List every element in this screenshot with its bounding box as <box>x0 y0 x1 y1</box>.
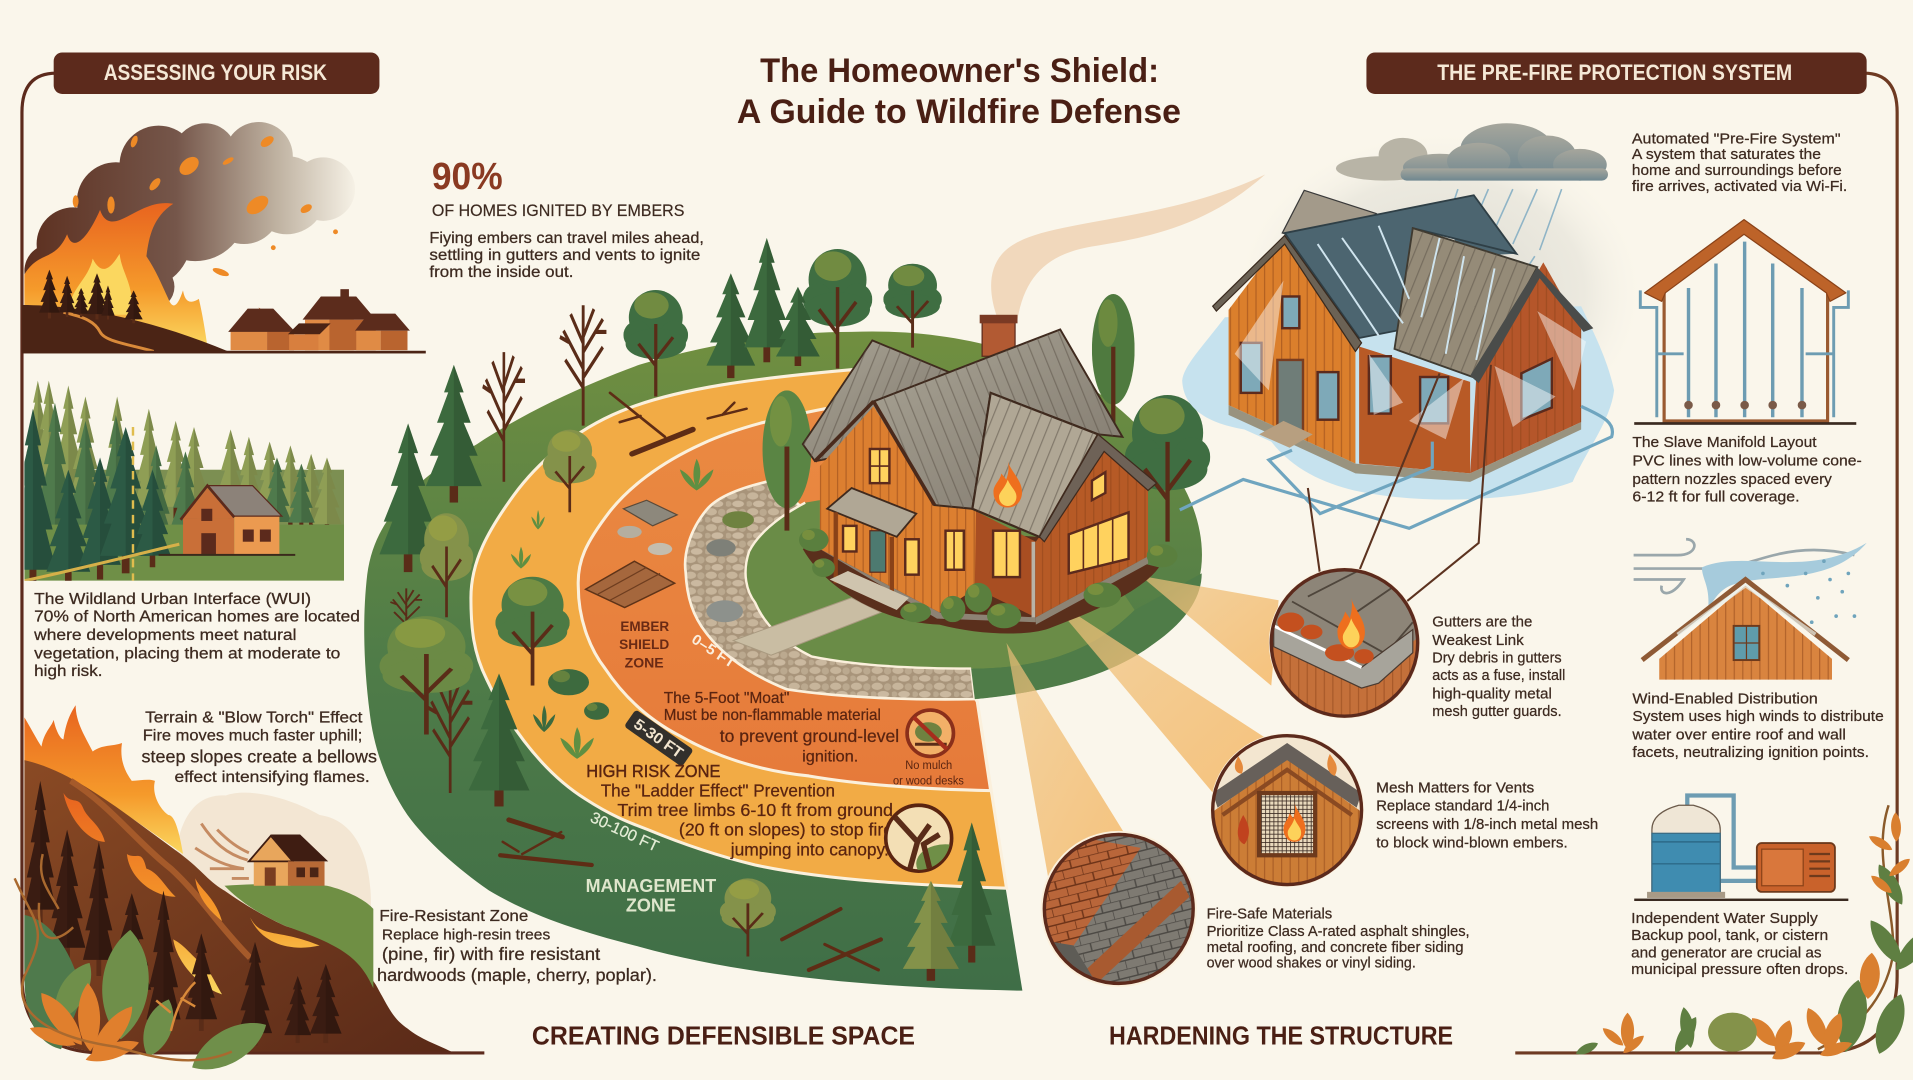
text: terrain and blow torch effect: steep slopes create a bellows <box>142 747 377 767</box>
house <box>181 486 282 555</box>
text: fire-resistant zone: (pine, fir) with fire resistant <box>382 944 600 964</box>
zone: management <box>364 331 1202 991</box>
text: fire-safe materials: metal roofing, and concrete fiber siding <box>1207 939 1464 956</box>
lawn <box>746 464 1135 669</box>
cloud <box>1336 123 1608 181</box>
title: The Homeowner's Shield: <box>760 52 1159 90</box>
text: wind-enabled distribution: water over entire roof and wall <box>1631 726 1846 743</box>
trees and plants <box>379 238 996 981</box>
text: the 5-foot moat: ignition. <box>802 747 858 765</box>
stat: 90 percent of homes ignited by embers: from the inside out. <box>429 263 573 281</box>
text: vents <box>1376 779 1598 851</box>
windows and door <box>1241 296 1552 423</box>
text: slave manifold layout: 6-12 ft for full coverage. <box>1632 488 1800 505</box>
heading: creating defensible space: CREATING DEFENSIBLE SPACE <box>532 1020 915 1050</box>
text: wildland urban interface: vegetation, placing them at moderate to <box>34 644 340 662</box>
icon: no mulch <box>893 710 964 787</box>
text: gutters <box>1432 613 1565 720</box>
foliage <box>15 854 274 1080</box>
pipes <box>1180 406 1612 528</box>
text: wind-enabled distribution: facets, neutralizing ignition points. <box>1632 744 1869 761</box>
callout beams <box>1007 576 1279 883</box>
smoke plume from chimney <box>991 174 1265 320</box>
windows <box>843 449 1129 577</box>
illustration: fire moving uphill <box>15 705 451 1080</box>
label: 5-30 ft <box>624 709 694 767</box>
text: gutters: acts as a fuse, install <box>1432 667 1565 684</box>
text: vents: to block wind-blown embers. <box>1376 834 1568 851</box>
foliage: bottom right corner <box>1574 805 1913 1064</box>
text: independent water supply: municipal pressure often drops. <box>1631 961 1848 978</box>
text: fire-resistant zone: Replace high-resin trees <box>382 926 551 943</box>
illustration: ember storm over houses <box>22 122 426 353</box>
heading: pre-fire protection system: THE PRE-FIRE PROTECTION SYSTEM <box>1437 60 1792 85</box>
text: the 5-foot moat: The 5-Foot "Moat" <box>664 689 790 707</box>
label: ember shield zone: SHIELD <box>619 636 669 652</box>
text: vents: Replace standard 1/4-inch <box>1376 798 1549 815</box>
heading: hardening the structure: HARDENING THE STRUCTURE <box>1109 1020 1453 1050</box>
stone path <box>685 481 975 699</box>
text: wind-enabled distribution: Wind-Enabled Distribution <box>1632 690 1818 707</box>
stones and decking <box>586 500 754 622</box>
text: fire-safe materials: over wood shakes or vinyl siding. <box>1207 954 1416 971</box>
text: slave manifold layout: The Slave Manifold Layout <box>1632 434 1817 451</box>
text: gutters: high-quality metal <box>1432 685 1552 702</box>
text: fire-resistant zone <box>377 907 657 985</box>
house on ridge <box>249 835 328 886</box>
text: independent water supply: Backup pool, tank, or cistern <box>1631 927 1828 944</box>
text: automated pre-fire system: Automated "Pre-Fire System" <box>1632 130 1841 147</box>
label: 30-100 ft: 30-100 FT <box>588 809 661 856</box>
label: 0-5 ft: 0–5 FT <box>688 632 738 672</box>
title: A Guide to Wildfire Defense <box>737 93 1181 131</box>
label: management zone <box>586 875 716 915</box>
text: terrain and blow torch effect <box>142 708 377 786</box>
icon: ladder effect trimming <box>884 803 954 873</box>
heading: assessing your risk <box>54 52 379 94</box>
heading: assessing your risk: ASSESSING YOUR RISK <box>104 60 327 85</box>
text: high risk zone ladder effect <box>586 761 893 859</box>
text: gutters: Weakest Link <box>1432 632 1524 649</box>
label: management zone: MANAGEMENT <box>586 875 716 896</box>
text: slave manifold layout: pattern nozzles spaced every <box>1632 471 1832 488</box>
diagram: slave manifold layout <box>1634 220 1856 425</box>
illustration: wildland urban interface <box>10 381 344 592</box>
zone: high risk <box>471 370 1007 888</box>
text: gutters: Dry debris in gutters <box>1432 649 1562 666</box>
text: independent water supply: Independent Water Supply <box>1631 910 1818 927</box>
text: terrain and blow torch effect: Terrain & "Blow Torch" Effect <box>145 708 363 726</box>
detail: roofing <box>1037 830 1202 988</box>
text: automated pre-fire system: home and surroundings before <box>1632 162 1842 179</box>
main house <box>763 294 1210 634</box>
text: vents: screens with 1/8-inch metal mesh <box>1376 816 1598 833</box>
text: independent water supply <box>1631 910 1848 978</box>
text: gutters: Gutters are the <box>1432 613 1532 630</box>
porch <box>827 488 916 537</box>
text: fire-resistant zone: hardwoods (maple, cherry, poplar). <box>377 965 657 985</box>
label: 5-30 ft: 5-30 FT <box>630 716 687 762</box>
text: the 5-foot moat: to prevent ground-level <box>720 727 899 746</box>
stat: 90 percent of homes ignited by embers: settling in gutters and vents to ignite <box>429 246 700 264</box>
stat: 90 percent of homes ignited by embers: 90% <box>432 156 503 198</box>
automated pre-fire house <box>1180 123 1647 528</box>
fallen logs <box>500 393 881 970</box>
text: fire-resistant zone: Fire-Resistant Zone <box>379 907 528 925</box>
icon: no mulch: No mulch <box>905 760 952 772</box>
text: wildland urban interface: where developments meet natural <box>33 626 296 644</box>
detail: vent <box>1210 734 1364 887</box>
text: the 5-foot moat: Must be non-flammable material <box>664 706 881 724</box>
text: fire-safe materials: Fire-Safe Materials <box>1207 906 1333 923</box>
title <box>737 52 1181 131</box>
text: high risk zone ladder effect: HIGH RISK ZONE <box>586 761 721 781</box>
heading: pre-fire protection system <box>1366 52 1867 94</box>
frame: right bracket <box>1515 73 1897 1053</box>
stat: 90 percent of homes ignited by embers <box>429 156 704 281</box>
label: ember shield zone: EMBER <box>620 618 669 634</box>
text: gutters: mesh gutter guards. <box>1432 703 1562 720</box>
text: wildland urban interface <box>33 590 360 680</box>
stat: 90 percent of homes ignited by embers: Fiying embers can travel miles ahead, <box>429 229 704 247</box>
illustration: wind-enabled distribution <box>1634 539 1867 680</box>
text: wildland urban interface: 70% of North American homes are located <box>34 608 360 626</box>
frame: left bracket <box>22 73 484 1053</box>
text: vents: Mesh Matters for Vents <box>1376 779 1535 796</box>
water spray <box>1235 281 1586 439</box>
text: terrain and blow torch effect: Fire moves much faster uphill; <box>143 727 362 745</box>
illustration: water tank and generator <box>1634 795 1848 901</box>
text: slave manifold layout <box>1632 434 1862 505</box>
label: ember shield zone: ZONE <box>625 654 664 670</box>
text: wind-enabled distribution <box>1631 690 1884 761</box>
text: terrain and blow torch effect: effect intensifying flames. <box>174 768 370 786</box>
label: management zone: ZONE <box>626 894 676 915</box>
text: slave manifold layout: PVC lines with low-volume cone- <box>1632 452 1862 469</box>
text: high risk zone ladder effect: Trim tree limbs 6-10 ft from ground <box>617 801 893 820</box>
text: independent water supply: and generator are crucial as <box>1631 945 1822 962</box>
label: ember shield zone <box>619 618 669 670</box>
text: automated pre-fire system <box>1632 130 1847 195</box>
text: fire-safe materials <box>1207 906 1470 971</box>
stat: 90 percent of homes ignited by embers: OF HOMES IGNITED BY EMBERS <box>432 202 684 220</box>
houses <box>228 289 410 350</box>
diagram: defensible space zones <box>364 238 1202 991</box>
text: fire-safe materials: Prioritize Class A-rated asphalt shingles, <box>1207 923 1470 940</box>
text: wildland urban interface: The Wildland Urban Interface (WUI) <box>34 590 311 608</box>
text: wind-enabled distribution: System uses high winds to distribute <box>1632 708 1884 725</box>
text: wildland urban interface: high risk. <box>34 662 102 680</box>
text: the 5-foot moat <box>664 689 899 765</box>
callout lines <box>1308 365 1491 601</box>
text: high risk zone ladder effect: The "Ladder Effect" Prevention <box>601 782 835 801</box>
zone: ember shield <box>578 409 991 791</box>
text: high risk zone ladder effect: (20 ft on slopes) to stop fire <box>679 821 893 840</box>
detail: gutter <box>1269 567 1421 726</box>
text: automated pre-fire system: A system that saturates the <box>1632 146 1821 163</box>
icon: no mulch: or wood desks <box>893 775 964 787</box>
text: high risk zone ladder effect: jumping into canopy. <box>730 840 889 859</box>
flagstone walkway <box>733 598 881 655</box>
text: automated pre-fire system: fire arrives, activated via Wi-Fi. <box>1632 178 1847 195</box>
